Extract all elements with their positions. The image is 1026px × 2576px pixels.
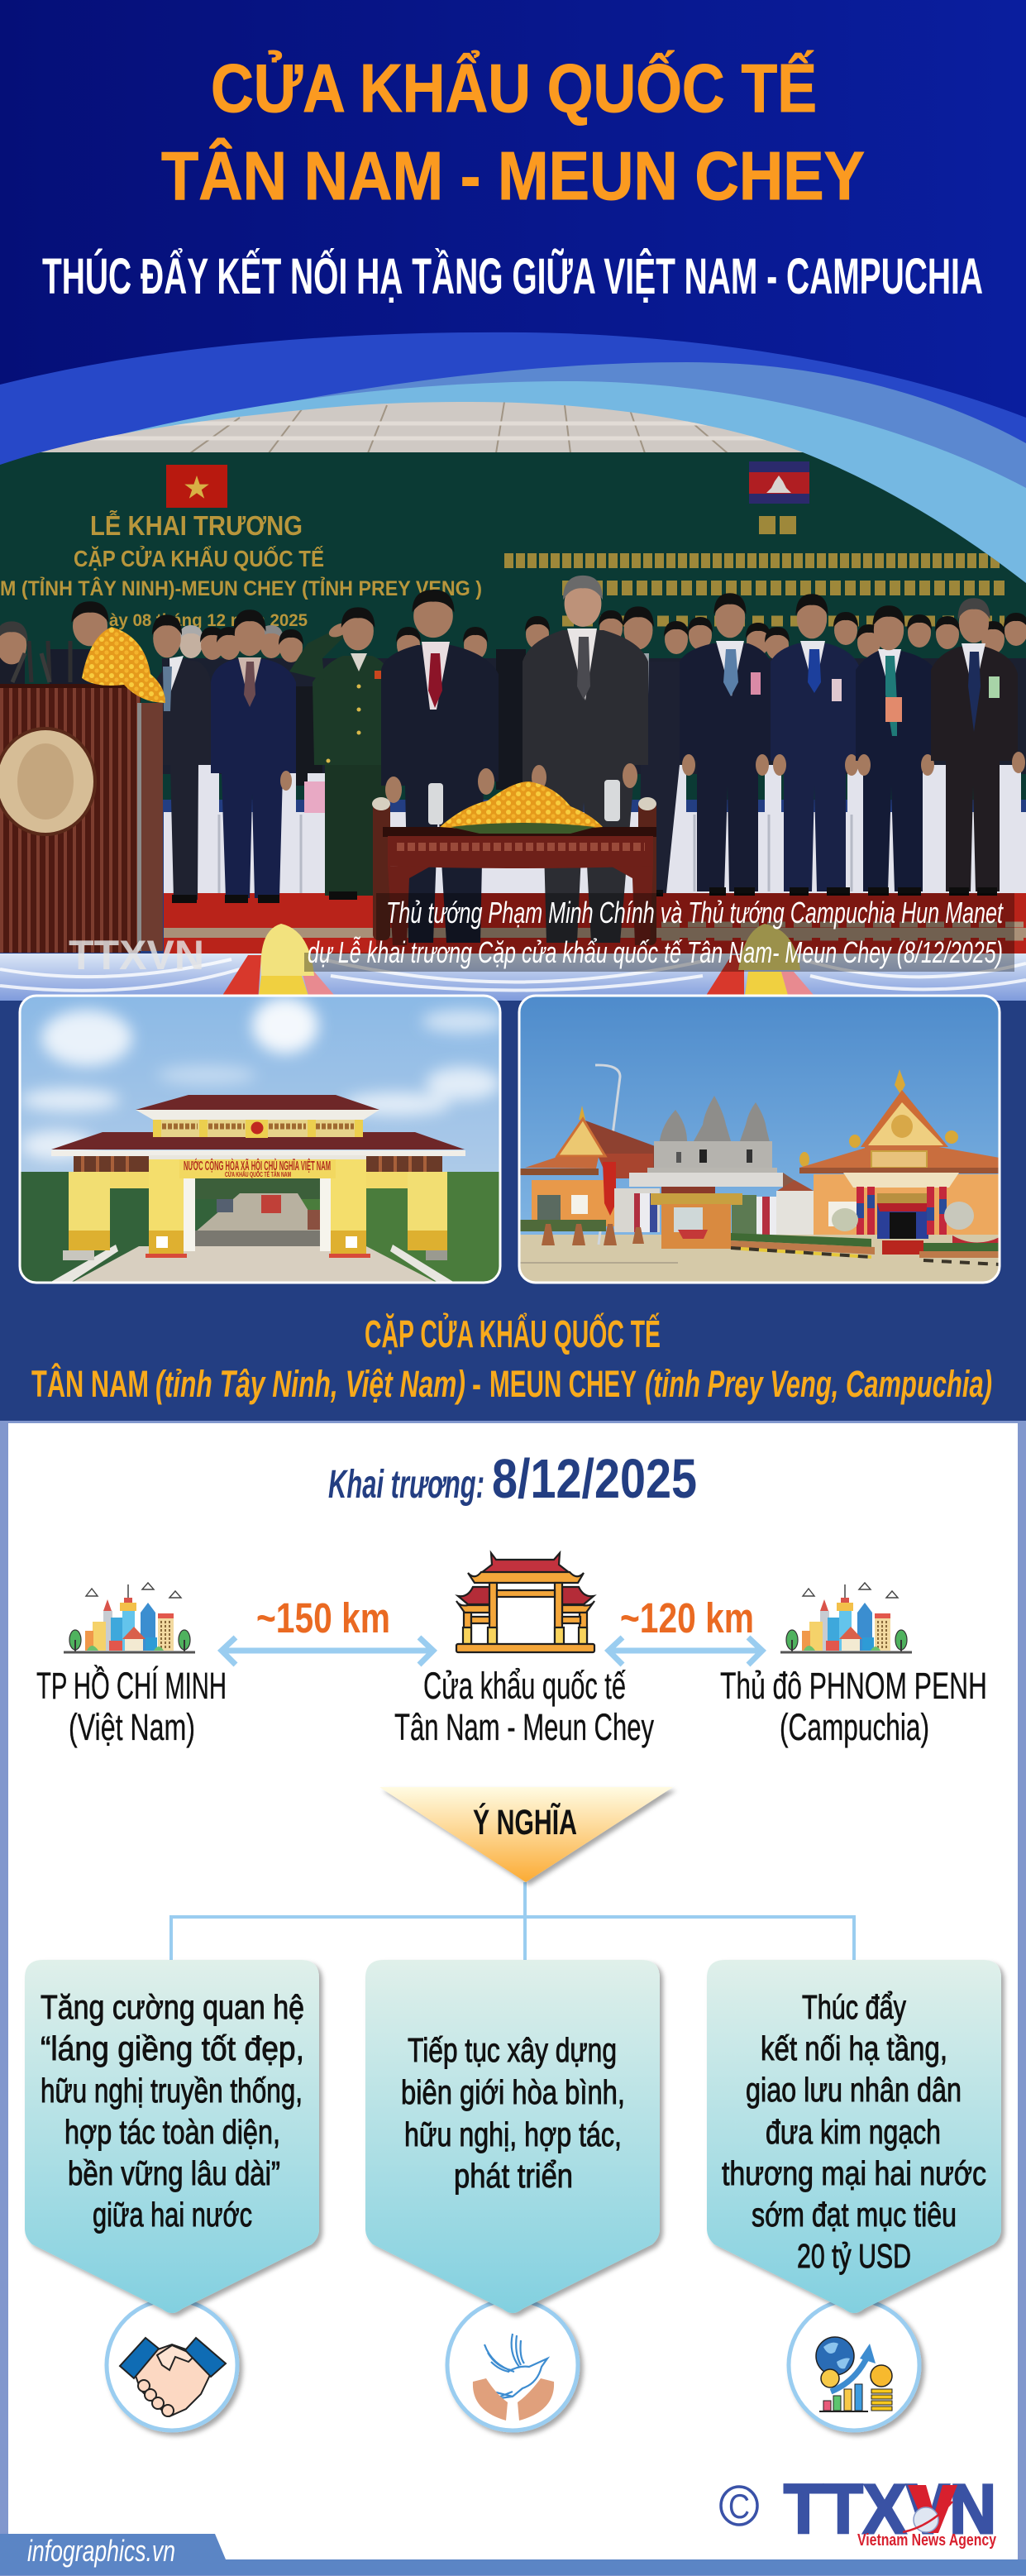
card: relations: bền vững lâu dài”	[68, 2154, 280, 2192]
card: relations	[25, 1960, 319, 2313]
photo: white chairs	[164, 765, 1026, 898]
logo: TTXVN: TTXVN	[784, 2470, 996, 2548]
right building	[895, 1069, 905, 1094]
upper roof	[136, 1110, 379, 1120]
heading: border gate pair: (tỉnh Tây Ninh, Việt Nam)	[155, 1363, 465, 1405]
photo: podium	[0, 684, 163, 953]
distance: 120 km: ~120 km	[620, 1594, 754, 1642]
heading: border gate pair	[31, 1312, 992, 1405]
opening date: Khai trương:	[328, 1463, 484, 1507]
connector lines	[171, 1882, 854, 1960]
icon: dove	[484, 2334, 547, 2398]
photo: Vietnamese banner text: M (TỈNH TÂY NINH)-MEUN CHEY (TỈNH PREY VENG )	[0, 576, 482, 600]
lamp post	[595, 1065, 620, 1245]
photo: ceiling	[38, 402, 805, 453]
official: man behind Prime Minister Manet	[623, 606, 680, 896]
photo: Khmer banner	[504, 525, 1005, 621]
soft clouds	[21, 997, 504, 1160]
official: Prime Minister Pham Minh Chinh	[381, 590, 499, 943]
heading: border gate pair: TÂN NAM	[31, 1363, 149, 1405]
official: general saluting	[289, 607, 389, 900]
arrow: HCMC to gate	[222, 1637, 433, 1665]
label: Phnom Penh: (Campuchia)	[780, 1706, 929, 1748]
heading: border gate pair: CẶP CỬA KHẨU QUỐC TẾ	[365, 1312, 661, 1355]
card: relations: Tăng cường quan hệ	[41, 1988, 304, 2026]
card: connectivity and trade: 20 tỷ USD	[797, 2237, 911, 2275]
card: peaceful border: hữu nghị, hợp tác,	[404, 2115, 622, 2153]
footer bar	[0, 2559, 1026, 2575]
photo: red carpet	[164, 893, 1026, 954]
official: right group man 2	[771, 594, 859, 896]
official: man behind podium	[152, 614, 211, 903]
wall behind gate	[614, 1188, 660, 1232]
photo: Meun Chey gate	[519, 996, 1000, 1283]
icon: hands	[473, 2378, 554, 2421]
header waves	[0, 332, 1026, 595]
card: relations: hợp tác toàn diện,	[64, 2113, 280, 2151]
title: TÂN NAM - MEUN CHEY	[161, 137, 865, 214]
kiosk	[661, 1187, 715, 1194]
opening date: 8/12/2025	[492, 1448, 697, 1510]
photo: Vietnamese banner text: CẶP CỬA KHẨU QUỐC TẾ	[74, 545, 324, 571]
photo: green backdrop	[0, 452, 1026, 800]
photo: decorative bunting	[0, 924, 1026, 1001]
photo: people on the left side	[0, 601, 109, 684]
official: right group man 3	[856, 605, 938, 896]
icon circle: dove and hands	[447, 2300, 578, 2430]
card: connectivity and trade	[707, 1960, 1001, 2313]
forest	[20, 1172, 260, 1283]
photo: Tân Nam gate: CỬA KHẨU QUỐC TẾ TÂN NAM	[225, 1170, 291, 1178]
photo: Vietnamese banner text: LỄ KHAI TRƯƠNG	[90, 510, 303, 541]
significance triangle	[379, 1787, 673, 1882]
photo: Vietnamese banner text	[0, 510, 482, 630]
arrow: gate to Phnom Penh	[608, 1637, 762, 1665]
upper frieze	[153, 1119, 363, 1137]
side wing walls and piers	[93, 1172, 149, 1188]
photo: officials	[152, 576, 1025, 943]
label: Ho Chi Minh City: TP HỒ CHÍ MINH	[36, 1665, 227, 1707]
panel: white content area	[0, 1421, 1026, 2576]
photo: Tân Nam gate	[20, 996, 504, 1283]
card: connectivity and trade: giao lưu nhân dân	[746, 2071, 962, 2109]
card: relations: giữa hai nước	[93, 2196, 252, 2234]
card: peaceful border	[365, 1960, 660, 2313]
lower roof	[51, 1150, 465, 1156]
icon: city right	[780, 1583, 912, 1652]
official: right group man 4	[931, 598, 1025, 896]
significance triangle: Ý NGHĨA	[473, 1803, 577, 1842]
copyright mark	[721, 2487, 757, 2526]
icon circle: handshake	[107, 2300, 237, 2430]
label: border gate	[394, 1665, 654, 1748]
card: connectivity and trade: đưa kim ngạch	[766, 2113, 941, 2151]
distance: 150 km	[222, 1594, 433, 1665]
concrete apron and railings	[72, 1246, 437, 1283]
label: border gate: Tân Nam - Meun Chey	[394, 1706, 654, 1748]
podium seal	[0, 729, 95, 834]
card: peaceful border: Tiếp tục xây dựng	[408, 2031, 617, 2069]
footer tab: infographics.vn: infographics.vn	[27, 2534, 175, 2568]
card: relations: hữu nghị truyền thống,	[41, 2072, 303, 2110]
card: peaceful border: phát triển	[454, 2157, 573, 2195]
official: right group man 1	[680, 593, 771, 896]
card: connectivity and trade: sớm đạt mục tiêu	[752, 2196, 957, 2234]
title	[161, 50, 865, 214]
left building	[585, 1121, 657, 1169]
photo: table flowers	[440, 781, 603, 834]
label: Phnom Penh	[720, 1665, 987, 1748]
heading: border gate pair: -	[472, 1363, 481, 1405]
label: Ho Chi Minh City: (Việt Nam)	[69, 1706, 195, 1748]
official: man in navy suit	[211, 609, 296, 903]
photo: TTXVN watermark: TTXVN	[69, 932, 204, 978]
distance: 150 km: ~150 km	[256, 1594, 390, 1642]
photo: caption shade	[304, 893, 1014, 972]
road through the gate	[195, 1178, 322, 1199]
photo: Cambodia flag	[749, 461, 809, 504]
trees and flags	[732, 1195, 756, 1235]
photo: Tân Nam gate: NƯỚC CỘNG HÒA XÃ HỘI CHỦ NGHĨA VIỆT NAM	[184, 1157, 331, 1173]
bollards	[542, 1224, 644, 1245]
copyright mark: C	[728, 2487, 750, 2526]
distance: 120 km	[608, 1594, 762, 1665]
icon: border gate	[456, 1553, 594, 1652]
label: Ho Chi Minh City	[36, 1665, 227, 1748]
card: connectivity and trade: Thúc đẩy	[802, 1988, 906, 2026]
icon circle: trade growth	[789, 2300, 919, 2430]
central pillars	[149, 1159, 184, 1231]
photo caption	[308, 896, 1004, 969]
hedges and kerbs	[731, 1233, 871, 1247]
photo: opening ceremony	[0, 397, 1026, 1001]
photo: Vietnam flag	[166, 465, 227, 508]
icon: globe and chart	[816, 2337, 892, 2411]
label: border gate: Cửa khẩu quốc tế	[423, 1665, 626, 1707]
icon: handshake	[120, 2338, 226, 2416]
header background	[0, 0, 1026, 513]
towers	[659, 1096, 772, 1152]
title: CỬA KHẨU QUỐC TẾ	[211, 50, 817, 127]
official: Prime Minister Hun Manet	[523, 576, 648, 943]
photo: ceremonial table	[372, 780, 656, 945]
card: connectivity and trade: kết nối hạ tầng,	[761, 2029, 947, 2067]
ground	[519, 1235, 1000, 1283]
card: peaceful border: biên giới hòa bình,	[401, 2073, 625, 2111]
card: relations: “láng giềng tốt đẹp,	[41, 2029, 304, 2067]
photo: Vietnamese banner text: ày 08 tháng 12 năm 2025	[109, 611, 308, 630]
photo: podium flowers	[82, 627, 165, 703]
heading: border gate pair: MEUN CHEY	[489, 1363, 637, 1405]
opening date	[328, 1448, 697, 1510]
icon: city left	[64, 1583, 195, 1652]
photo: back row of people	[162, 610, 1026, 790]
